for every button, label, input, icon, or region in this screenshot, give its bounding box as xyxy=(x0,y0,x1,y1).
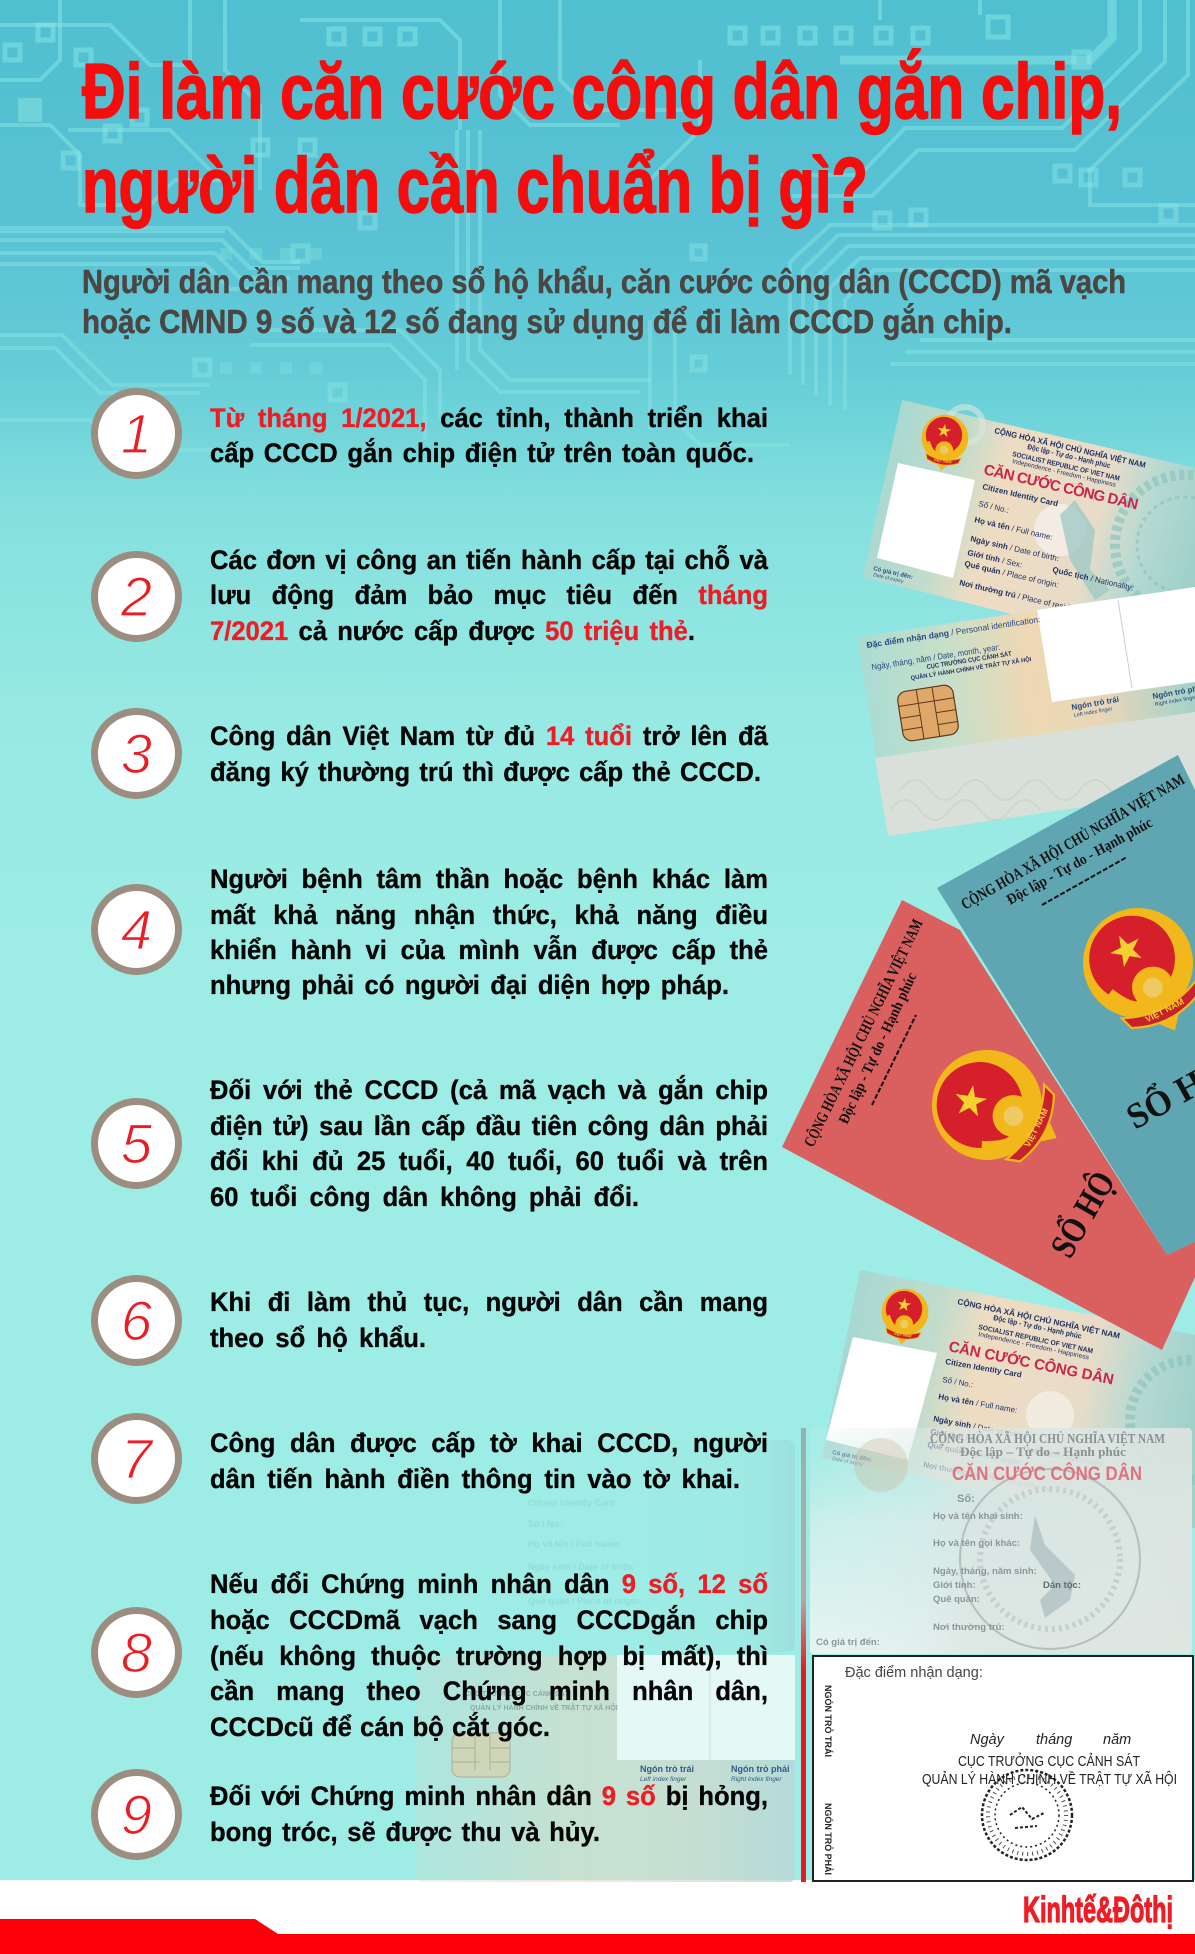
card 3: second front of chip ID card: CĂN CƯỚC CÔNG DÂN xyxy=(947,1337,1115,1388)
old ID form: front side: Họ và tên khai sinh: xyxy=(933,1511,1023,1522)
card 3: second front of chip ID card: Độc lập - Tự do - Hạnh phúc xyxy=(993,1313,1082,1341)
card 3: second front of chip ID card: Date of expiry xyxy=(832,1456,864,1468)
card 3: second front of chip ID card xyxy=(822,1270,1195,1528)
card 1: front of chip ID card: Có giá trị đến: xyxy=(873,565,913,581)
card 1: front of chip ID card: Giới tính / Sex: xyxy=(967,548,1023,570)
footer red bar xyxy=(0,1919,1195,1954)
old ID form: front side: Giới tính: xyxy=(933,1580,976,1591)
title: người dân cần chuẩn bị gì? xyxy=(82,141,868,229)
card 3: second front of chip ID card: Họ và tên / Full name: xyxy=(938,1392,1018,1415)
card 1: front of chip ID card: Nơi thường trú / Place of residence xyxy=(959,578,1088,616)
pads xyxy=(5,17,1176,400)
number badge 9 xyxy=(91,1768,182,1860)
red household book: CỘNG HÒA XÃ HỘI CHỦ NGHĨA VIỆT NAM xyxy=(800,916,927,1150)
card 3: second front of chip ID card: Có giá trị đến: xyxy=(832,1449,873,1464)
number badge 6: 6 xyxy=(121,1288,152,1352)
old ID form: front side: Họ và tên gọi khác: xyxy=(933,1538,1020,1549)
red household book xyxy=(782,900,1195,1350)
card 1: front of chip ID card: Independence - Freedom - Happiness xyxy=(1012,458,1117,489)
number badge 8 xyxy=(91,1606,182,1698)
card 1: front of chip ID card: Quốc tịch / Nationality: xyxy=(1052,565,1135,593)
card 1: front of chip ID card: Họ và tên / Full name: xyxy=(974,515,1054,542)
ghost card back behind items 8 and 9: Ngón trỏ phải xyxy=(731,1764,790,1774)
card 1: front of chip ID card: Độc lập - Tự do - Hạnh phúc xyxy=(1027,442,1111,470)
ghost card back behind items 8 and 9 xyxy=(415,1655,795,1882)
card 1: front of chip ID card: Date of expiry xyxy=(873,572,904,585)
card 2: back of chip ID card: Ngón trỏ trái xyxy=(1071,695,1120,712)
ghost card front behind item 7 and 8: Họ và tên / Full name: xyxy=(528,1539,621,1549)
text 9: Đối với Chứng minh nhân dân 9 số bị hỏng, xyxy=(210,1781,768,1811)
item 4: khiển hành vi của mình vẫn được cấp thẻ xyxy=(210,935,768,965)
old ID form: front side: Dân tộc: xyxy=(1043,1580,1081,1591)
text 3: Công dân Việt Nam từ đủ 14 tuổi trở lên đã xyxy=(210,721,768,751)
number badge 4 xyxy=(91,884,182,974)
card 2: back of chip ID card: Đặc điểm nhận dạng / Personal identification: xyxy=(866,614,1041,650)
fingerprint blanks xyxy=(1037,587,1195,702)
number badge 5: 5 xyxy=(121,1112,152,1174)
card 3: second front of chip ID card: CỘNG HÒA XÃ HỘI CHỦ NGHĨA VIỆT NAM xyxy=(957,1297,1121,1341)
card 1: front of chip ID card xyxy=(863,400,1195,660)
title xyxy=(82,47,1122,229)
item 2: lưu động đảm bảo mục tiêu đến tháng xyxy=(210,580,768,610)
old ID form: back side with black border: tháng xyxy=(1036,1732,1072,1748)
item 2 xyxy=(91,545,768,646)
item 5: 60 tuổi công dân không phải đổi. xyxy=(210,1182,639,1212)
old ID form: front side: Ngày, tháng, năm sinh: xyxy=(933,1566,1037,1577)
item 9: bong tróc, sẽ được thu và hủy. xyxy=(210,1817,600,1847)
vertical separator bar xyxy=(801,1428,806,1882)
card 2: back of chip ID card xyxy=(857,587,1195,836)
number badge 4: 4 xyxy=(121,898,152,960)
old ID form: front side xyxy=(810,1428,1192,1654)
number badge 6 xyxy=(91,1274,182,1366)
background: circuit board pattern xyxy=(0,0,1195,450)
emblem xyxy=(1064,889,1195,1057)
card 1: front of chip ID card: CỘNG HÒA XÃ HỘI CHỦ NGHĨA VIỆT NAM xyxy=(994,426,1147,470)
ghost card front behind item 7 and 8: Ngày sinh / Date of birth: xyxy=(528,1562,635,1572)
item 4: mất khả năng nhận thức, khả năng điều xyxy=(210,900,768,930)
photo placeholder xyxy=(877,463,975,578)
card 2: back of chip ID card: Left index finger xyxy=(1073,706,1113,719)
text 5: Đối với thẻ CCCD (cả mã vạch và gắn chip xyxy=(210,1075,768,1105)
ghost card back behind items 8 and 9: Ngón trỏ trái xyxy=(640,1764,694,1774)
old ID form: back side with black border: Ngày xyxy=(970,1732,1005,1748)
subtitle: hoặc CMND 9 số và 12 số đang sử dụng để đi làm CCCD gắn chip. xyxy=(82,303,1012,340)
old ID form: front side: Nơi thường trú: xyxy=(933,1622,1005,1633)
old ID form: front side: Quê quán: xyxy=(933,1594,980,1605)
item 8 xyxy=(91,1569,768,1742)
item 8: hoặc CCCDmã vạch sang CCCDgắn chip xyxy=(210,1605,768,1635)
card 3: second front of chip ID card: SOCIALIST REPUBLIC OF VIET NAM xyxy=(978,1324,1094,1355)
number badge 3: 3 xyxy=(121,722,152,784)
chip xyxy=(896,684,960,742)
emblem xyxy=(877,1286,931,1348)
number badge 5 xyxy=(91,1098,182,1188)
item 8: cần mang theo Chứng minh nhân dân, xyxy=(210,1676,768,1706)
number badge 2 xyxy=(91,550,182,642)
item 5: điện tử) sau lần cấp đầu tiên công dân phải xyxy=(210,1111,768,1141)
card 2: back of chip ID card: CỤC TRƯỞNG CỤC CẢNH SÁT xyxy=(926,649,1012,671)
item 8: CCCDcũ để cán bộ cắt góc. xyxy=(210,1712,550,1742)
ghost card back behind items 8 and 9: QUẢN LÝ HÀNH CHÍNH VỀ TRẬT TỰ XÃ HỘI xyxy=(470,1702,618,1712)
card 3: second front of chip ID card: Independence - Freedom - Happiness xyxy=(978,1331,1090,1362)
card 3: second front of chip ID card: Citizen Identity Card xyxy=(945,1357,1022,1379)
photo placeholder xyxy=(826,1337,937,1460)
text 1: Từ tháng 1/2021, các tỉnh, thành triển khai xyxy=(210,403,768,433)
item 5 xyxy=(91,1074,768,1212)
item 3: đăng ký thường trú thì được cấp thẻ CCCD. xyxy=(210,757,761,787)
number badge 7: 7 xyxy=(121,1426,152,1490)
emblem xyxy=(917,412,971,474)
card 3: second front of chip ID card: Ngày sinh / Date of birth: xyxy=(933,1414,1023,1440)
number badge 8: 8 xyxy=(121,1620,152,1684)
lower pattern band xyxy=(875,712,1195,836)
ghost card back behind items 8 and 9: Left index finger xyxy=(640,1776,687,1783)
card 1: front of chip ID card: Ngày sinh / Date of birth: xyxy=(970,534,1060,563)
stamp xyxy=(982,1770,1072,1860)
ghost card front behind item 7 and 8 xyxy=(528,1440,795,1652)
item 7: dân tiến hành điền thông tin vào tờ khai. xyxy=(210,1464,740,1494)
red household book: Độc lập - Tự do - Hạnh phúc xyxy=(836,970,920,1127)
item 7 xyxy=(91,1413,768,1504)
text 4: Người bệnh tâm thần hoặc bệnh khác làm xyxy=(210,864,768,894)
card 2: back of chip ID card: Ngày, tháng, năm / Date, month, year: xyxy=(871,642,1001,672)
item 5: đổi khi đủ 25 tuổi, 40 tuổi, 60 tuổi và trên xyxy=(210,1146,768,1176)
old ID form: back side with black border: NGÓN TRỎ TRÁI xyxy=(823,1685,834,1757)
old ID form: front side: CĂN CƯỚC CÔNG DÂN xyxy=(952,1463,1142,1485)
card 1: front of chip ID card: Citizen Identity Card xyxy=(982,482,1059,508)
old ID form: front side: Số: xyxy=(957,1493,975,1505)
old ID form: back side with black border: Đặc điểm nhận dạng: xyxy=(845,1665,983,1681)
card 1: front of chip ID card: Quê quán / Place of origin: xyxy=(964,559,1060,590)
emblem xyxy=(913,1031,1081,1189)
item 8: (nếu không thuộc trường hợp bị mất), thì xyxy=(210,1641,768,1671)
text 2: Các đơn vị công an tiến hành cấp tại chỗ và xyxy=(210,545,768,575)
red household book: SỔ HỘ xyxy=(1041,1164,1123,1264)
card 1: front of chip ID card: SOCIALIST REPUBLIC OF VIET NAM xyxy=(1012,451,1120,483)
item 6 xyxy=(91,1275,768,1366)
ghost card front behind item 7 and 8: Citizen Identity Card xyxy=(528,1498,615,1508)
item 1 xyxy=(91,388,768,479)
text 7: Công dân được cấp tờ khai CCCD, người xyxy=(210,1428,768,1458)
card 1: front of chip ID card: Số / No.: xyxy=(978,499,1010,515)
item 1: cấp CCCD gắn chip điện tử trên toàn quốc. xyxy=(210,438,754,468)
teal household book xyxy=(937,755,1195,1255)
card 3: second front of chip ID card: Giới tính / Sex: xyxy=(930,1427,986,1447)
item 3 xyxy=(91,708,768,799)
number badge 2: 2 xyxy=(121,564,152,628)
ghost card front behind item 7 and 8: Quê quán / Place of origin: xyxy=(528,1596,642,1606)
text 8: Nếu đổi Chứng minh nhân dân 9 số, 12 số xyxy=(210,1569,768,1599)
old ID form: back side with black border: năm xyxy=(1103,1732,1131,1748)
ghost card back behind items 8 and 9: CỤC TRƯỞNG CỤC CẢNH SÁT xyxy=(465,1689,570,1698)
item 9 xyxy=(91,1769,768,1860)
old ID form: back side with black border xyxy=(813,1656,1193,1881)
card 3: second front of chip ID card: Quốc tịch / Nationality: xyxy=(1023,1444,1106,1469)
old ID form: back side with black border: CỤC TRƯỞNG CỤC CẢNH SÁT xyxy=(958,1752,1140,1770)
card 2: back of chip ID card: QUẢN LÝ HÀNH CHÍNH VỀ TRẬT TỰ XÃ HỘI xyxy=(910,655,1032,682)
item 2: 7/2021 cả nước cấp được 50 triệu thẻ. xyxy=(210,616,695,646)
item 6: theo sổ hộ khẩu. xyxy=(210,1323,426,1353)
item 4 xyxy=(91,864,768,1000)
old ID form: back side with black border: NGÓN TRỎ PHẢI xyxy=(823,1803,834,1875)
subtitle xyxy=(82,263,1126,340)
teal household book: Độc lập - Tự do - Hạnh phúc xyxy=(1004,815,1156,908)
old ID form: front side: Độc lập – Tự do – Hạnh phúc xyxy=(960,1444,1126,1459)
old ID form: front side: Có giá trị đến: xyxy=(816,1637,880,1648)
number badge 9: 9 xyxy=(121,1782,152,1846)
card 3: second front of chip ID card: Quê quán / Place of origin: xyxy=(927,1440,1023,1467)
item 4: nhưng phải có người đại diện hợp pháp. xyxy=(210,970,729,1000)
ghost card back behind items 8 and 9: Right index finger xyxy=(731,1776,782,1783)
card 3: second front of chip ID card: Số / No.: xyxy=(942,1375,974,1389)
card 3: second front of chip ID card: Nơi thường trú / Place of residence xyxy=(923,1460,1053,1494)
number badge 1 xyxy=(91,388,182,478)
number badge 3 xyxy=(91,708,182,798)
text 6: Khi đi làm thủ tục, người dân cần mang xyxy=(210,1287,768,1317)
number badge 1: 1 xyxy=(121,402,152,464)
card 1: front of chip ID card: CĂN CƯỚC CÔNG DÂN xyxy=(982,460,1140,513)
number badge 7 xyxy=(91,1412,182,1504)
ghost card front behind item 7 and 8: Số / No.: xyxy=(528,1519,564,1529)
